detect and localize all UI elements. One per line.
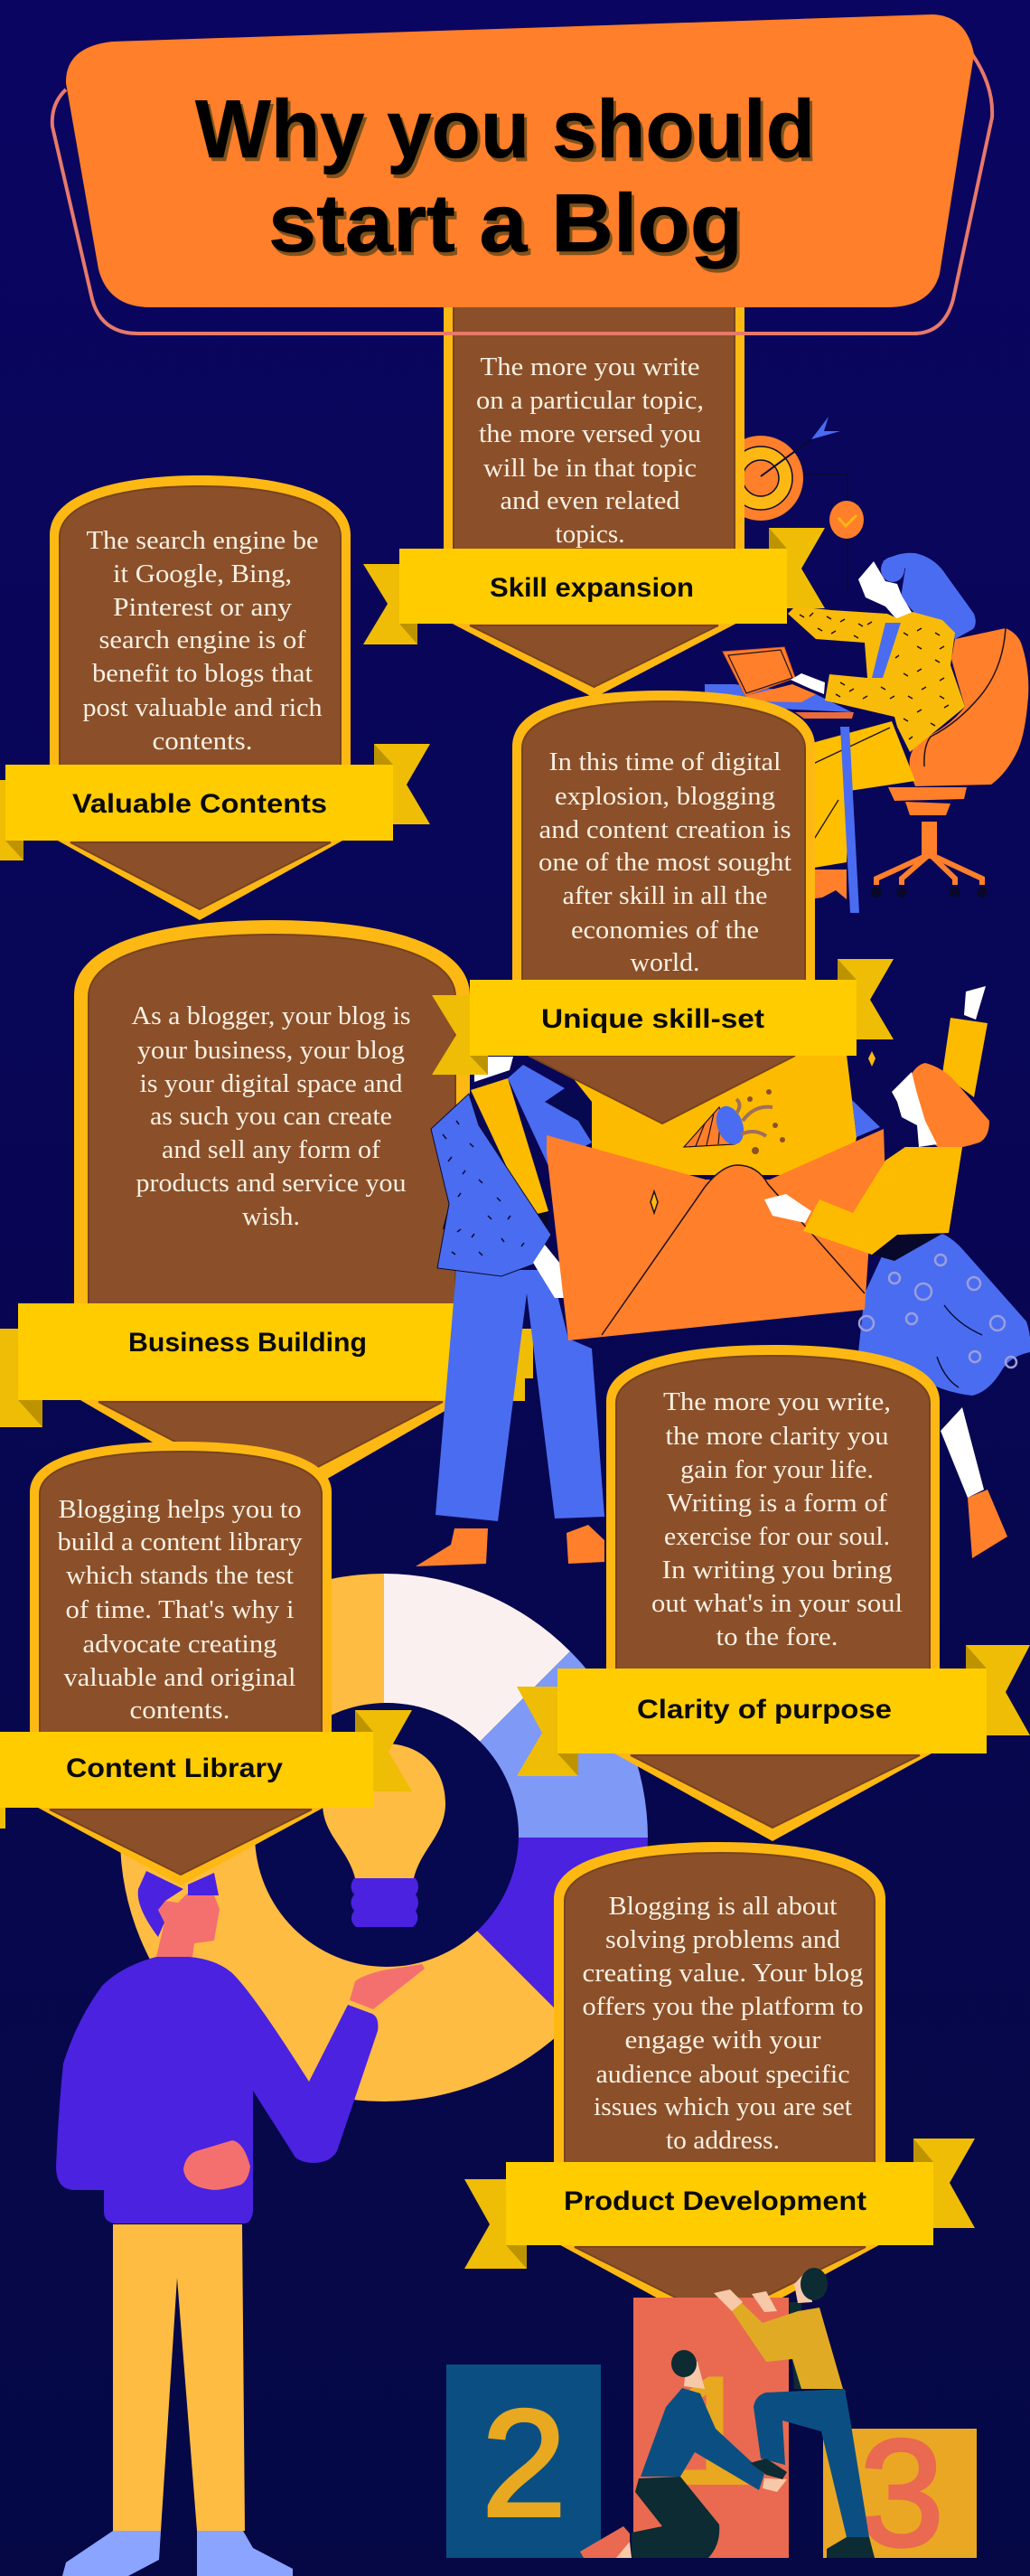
- heading: [195, 84, 815, 269]
- bulb base: [351, 1878, 418, 1927]
- ribbon: [363, 528, 825, 644]
- text block: [83, 526, 323, 756]
- text block: valuable and original: [63, 1663, 296, 1692]
- panel fill: [89, 935, 455, 1320]
- face: [892, 1072, 937, 1147]
- panel fill: [522, 701, 805, 994]
- white leg: [941, 1407, 984, 1498]
- pointer: [50, 836, 351, 920]
- text block: gain for your life.: [680, 1455, 874, 1484]
- hand: [764, 1194, 811, 1223]
- hands: [763, 2478, 787, 2492]
- ribbon: Business Building: [128, 1328, 367, 1358]
- hair: [883, 553, 976, 639]
- text block: In writing you bring: [661, 1556, 893, 1584]
- sweater: [56, 1957, 378, 2223]
- text block: which stands the test: [66, 1561, 294, 1590]
- envelope front flap: [602, 1165, 865, 1335]
- panel: clarity of purpose: [517, 1345, 1030, 1841]
- text block: [582, 1892, 864, 2155]
- ribbon: Unique skill-set: [541, 1004, 764, 1034]
- light bulb: [323, 1744, 445, 1878]
- skirt dots: [859, 1255, 1016, 1368]
- hand: [791, 673, 825, 694]
- panel: content library: [0, 1442, 412, 1885]
- shirt: [872, 623, 901, 678]
- text block: Blogging helps you to: [58, 1495, 302, 1524]
- text block: The more you write,: [663, 1387, 891, 1416]
- pointer: [529, 1056, 795, 1123]
- hand: [533, 1245, 572, 1298]
- panel frame: [74, 920, 470, 1320]
- text block: the more clarity you: [665, 1422, 889, 1451]
- pointer: [554, 2242, 885, 2332]
- panel: valuable contents: [0, 475, 430, 920]
- kneeling climber: [580, 2350, 787, 2558]
- text block: topics.: [555, 520, 625, 549]
- text block: world.: [631, 948, 699, 977]
- envelope back flap: [547, 1129, 885, 1340]
- right boot: [566, 1525, 604, 1564]
- illustration: woman at desk with target: [705, 417, 1028, 913]
- shirt: [471, 1078, 548, 1216]
- panel frame: [30, 1442, 332, 1744]
- text block: As a blogger, your blog is: [132, 1001, 410, 1030]
- illustration: woman opening envelope: [547, 986, 1030, 1558]
- orange shape: [66, 14, 974, 307]
- skirt folds: [937, 1305, 982, 1387]
- text block: products and service you: [136, 1169, 407, 1198]
- ribbon: [464, 2139, 975, 2269]
- left sock: [62, 2531, 161, 2576]
- raised sleeve: [942, 1018, 988, 1097]
- podium block 3: 3: [859, 2408, 944, 2576]
- panel fill: [454, 298, 735, 560]
- trousers: [113, 2224, 245, 2531]
- torso: [803, 1147, 962, 1255]
- skirt: [858, 1233, 1030, 1396]
- ribbon: Clarity of purpose: [637, 1695, 892, 1725]
- boot: [968, 1490, 1007, 1558]
- text block: issues which you are set: [594, 2092, 852, 2121]
- text block: [132, 1001, 410, 1231]
- illustration: podium with climbers: [446, 2268, 977, 2576]
- ribbon: Valuable Contents: [72, 789, 327, 819]
- text block: exercise for our soul.: [664, 1522, 890, 1551]
- panel frame: [444, 298, 744, 560]
- text block: is your digital space and: [139, 1069, 403, 1098]
- panel frame: [554, 1842, 885, 2174]
- jacket pattern: [443, 1121, 524, 1255]
- sweater: [641, 2388, 764, 2490]
- chair: [910, 628, 1028, 786]
- head and neck: [156, 1894, 220, 1957]
- hands: [714, 2289, 743, 2311]
- text block: creating value. Your blog: [582, 1959, 864, 1988]
- right sock: [197, 2531, 293, 2576]
- neck: [474, 1057, 513, 1082]
- hair: [138, 1871, 219, 1937]
- hair: [801, 2268, 828, 2300]
- title banner: [52, 14, 992, 334]
- text block: contents.: [130, 1696, 229, 1725]
- left boot: [416, 1528, 488, 1566]
- text block: Blogging is all about: [609, 1892, 837, 1921]
- panel: product development: [464, 1842, 975, 2332]
- panel: business building: [0, 920, 533, 1511]
- jacket left: [431, 1094, 551, 1276]
- icon: check badge: [829, 501, 864, 539]
- panel fill: [616, 1356, 930, 1681]
- ribbon: [0, 744, 430, 860]
- shoe: [809, 870, 847, 899]
- text block: and content creation is: [538, 815, 791, 844]
- small star: [868, 1051, 876, 1067]
- text block: your business, your blog: [137, 1036, 405, 1065]
- belt: [443, 1204, 548, 1229]
- text block: and sell any form of: [162, 1135, 380, 1164]
- text block: on a particular topic,: [476, 386, 704, 415]
- raised hand: [964, 986, 986, 1020]
- jacket pattern: [800, 613, 949, 739]
- pointer: [606, 1749, 940, 1841]
- panel fill: [565, 1853, 875, 2174]
- desk: [705, 684, 852, 712]
- panel fill: [40, 1452, 322, 1744]
- star: [651, 1191, 658, 1213]
- icon: target: [718, 417, 847, 591]
- raised hand: [350, 1964, 425, 2009]
- face: [794, 2270, 812, 2303]
- text block: search engine is of: [99, 625, 306, 654]
- standing climber: [714, 2268, 875, 2558]
- lower hand: [183, 2140, 250, 2190]
- foot: [580, 2526, 630, 2558]
- text block: Pinterest or any: [113, 593, 293, 622]
- chair base: [888, 787, 967, 801]
- ribbon: Product Development: [564, 2186, 866, 2216]
- text block: will be in that topic: [483, 454, 697, 483]
- pointer: [30, 1803, 332, 1885]
- panel: unique skill-set: [432, 691, 894, 1123]
- jacket: [788, 606, 965, 752]
- text block: after skill in all the: [562, 881, 768, 910]
- text block: as such you can create: [150, 1102, 392, 1131]
- sleeve over envelope: [803, 1147, 962, 1255]
- lower shoe: [827, 2537, 875, 2558]
- jacket right: [508, 1065, 592, 1166]
- text block: of time. That's why i: [65, 1595, 295, 1624]
- heading: Why you should: [195, 84, 815, 175]
- text block: wish.: [242, 1202, 300, 1231]
- trousers: [754, 2389, 869, 2537]
- text block: [58, 1495, 303, 1725]
- text block: one of the most sought: [538, 848, 791, 877]
- text block: engage with your: [625, 2026, 821, 2054]
- text block: the more versed you: [479, 419, 701, 448]
- text block: [651, 1387, 903, 1651]
- text block: economies of the: [571, 916, 759, 945]
- ribbon: Content Library: [66, 1753, 283, 1783]
- podium block 1: [633, 2298, 789, 2558]
- heading: start a Blog: [268, 178, 743, 269]
- jacket: [732, 2302, 843, 2389]
- text block: post valuable and rich: [83, 693, 323, 722]
- ribbon: Skill expansion: [490, 573, 694, 603]
- panel frame: [50, 475, 351, 777]
- text block: audience about specific: [596, 2060, 849, 2089]
- party popper: [684, 1089, 785, 1154]
- ribbon: [432, 959, 894, 1075]
- illustration: standing man holding bulb: [56, 1871, 425, 2576]
- podium block 1: 1: [670, 2346, 754, 2515]
- text block: and even related: [501, 486, 680, 515]
- text block: The search engine be: [87, 526, 318, 555]
- podium block 3: [823, 2408, 977, 2576]
- text block: contents.: [152, 727, 253, 756]
- panel frame: [606, 1345, 940, 1681]
- donut chart with light bulb: [120, 1574, 648, 2101]
- illustration: man with envelope: [416, 1039, 880, 1566]
- text block: out what's in your soul: [651, 1589, 903, 1618]
- ribbon: [0, 1710, 412, 1829]
- desk leg: [840, 727, 859, 913]
- blue back edge of envelope: [852, 1100, 880, 1137]
- text block: Writing is a form of: [667, 1489, 887, 1518]
- mid shoe: [750, 2458, 787, 2479]
- podium block 2: 2: [482, 2378, 566, 2548]
- hair: [671, 2350, 697, 2377]
- text block: solving problems and: [605, 1925, 841, 1954]
- panel frame: [512, 691, 815, 994]
- ribbon: [517, 1645, 1030, 1776]
- trousers: [435, 1270, 604, 1521]
- ribbon: [0, 1303, 533, 1427]
- jacket gap: [545, 1090, 592, 1142]
- legs: [809, 721, 915, 869]
- text block: [538, 747, 791, 977]
- text block: In this time of digital: [549, 747, 781, 776]
- laptop: [723, 647, 816, 702]
- dark inner: [789, 2302, 801, 2389]
- face: [858, 561, 913, 620]
- belt: [872, 1233, 949, 1261]
- pointer: [74, 1396, 470, 1511]
- text block: [476, 353, 704, 549]
- text block: explosion, blogging: [555, 782, 775, 811]
- text block: benefit to blogs that: [92, 659, 313, 688]
- outline: [52, 54, 992, 334]
- text block: advocate creating: [83, 1630, 276, 1659]
- text block: it Google, Bing,: [113, 559, 292, 588]
- pointer: [444, 619, 744, 698]
- text block: to address.: [666, 2126, 780, 2155]
- text block: offers you the platform to: [582, 1992, 864, 2021]
- face: [684, 2359, 705, 2389]
- hair: [912, 1063, 989, 1149]
- envelope back: [542, 1039, 857, 1175]
- panel: skill expansion: [363, 298, 825, 698]
- podium block 2: [446, 2364, 601, 2558]
- panel fill: [60, 486, 341, 777]
- trousers: [632, 2477, 719, 2558]
- text block: to the fore.: [716, 1622, 838, 1651]
- text block: The more you write: [481, 353, 699, 381]
- text block: build a content library: [58, 1528, 303, 1556]
